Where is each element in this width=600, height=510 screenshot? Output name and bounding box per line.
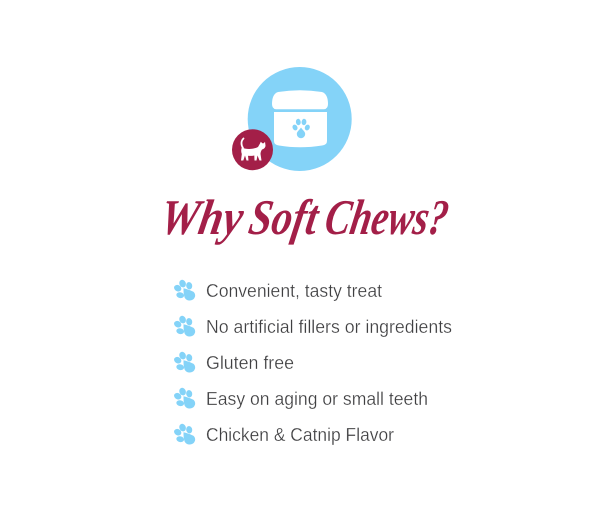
list item: gluten free <box>173 351 294 373</box>
jar body <box>274 112 327 147</box>
icon: paw bullet <box>173 387 195 409</box>
item text: Easy on aging or small teeth <box>206 389 428 409</box>
cat badge <box>232 129 273 170</box>
item text: Convenient, tasty treat <box>206 281 382 301</box>
item text: Gluten free <box>206 353 294 373</box>
icon: cat <box>241 138 266 160</box>
item text: No artificial fillers or ingredients <box>206 317 452 337</box>
jar lid <box>272 90 328 109</box>
list item: flavor <box>173 423 394 445</box>
benefits list <box>173 279 452 445</box>
item text: Chicken & Catnip Flavor <box>206 425 394 445</box>
title: Chews? <box>321 189 453 245</box>
title <box>156 189 453 245</box>
jar background circle <box>248 67 352 171</box>
title: Soft <box>245 189 324 245</box>
list item: easy on teeth <box>173 387 428 409</box>
icon: paw bullet <box>173 315 195 337</box>
icon: paw bullet <box>173 351 195 373</box>
icon: paw bullet <box>173 279 195 301</box>
title: Why <box>156 189 248 245</box>
icon: soft chew jar <box>232 67 352 171</box>
list item: convenient <box>173 279 382 301</box>
icon: paw bullet <box>173 423 195 445</box>
icon: paw on jar <box>292 118 311 138</box>
list item: no fillers <box>173 315 452 337</box>
